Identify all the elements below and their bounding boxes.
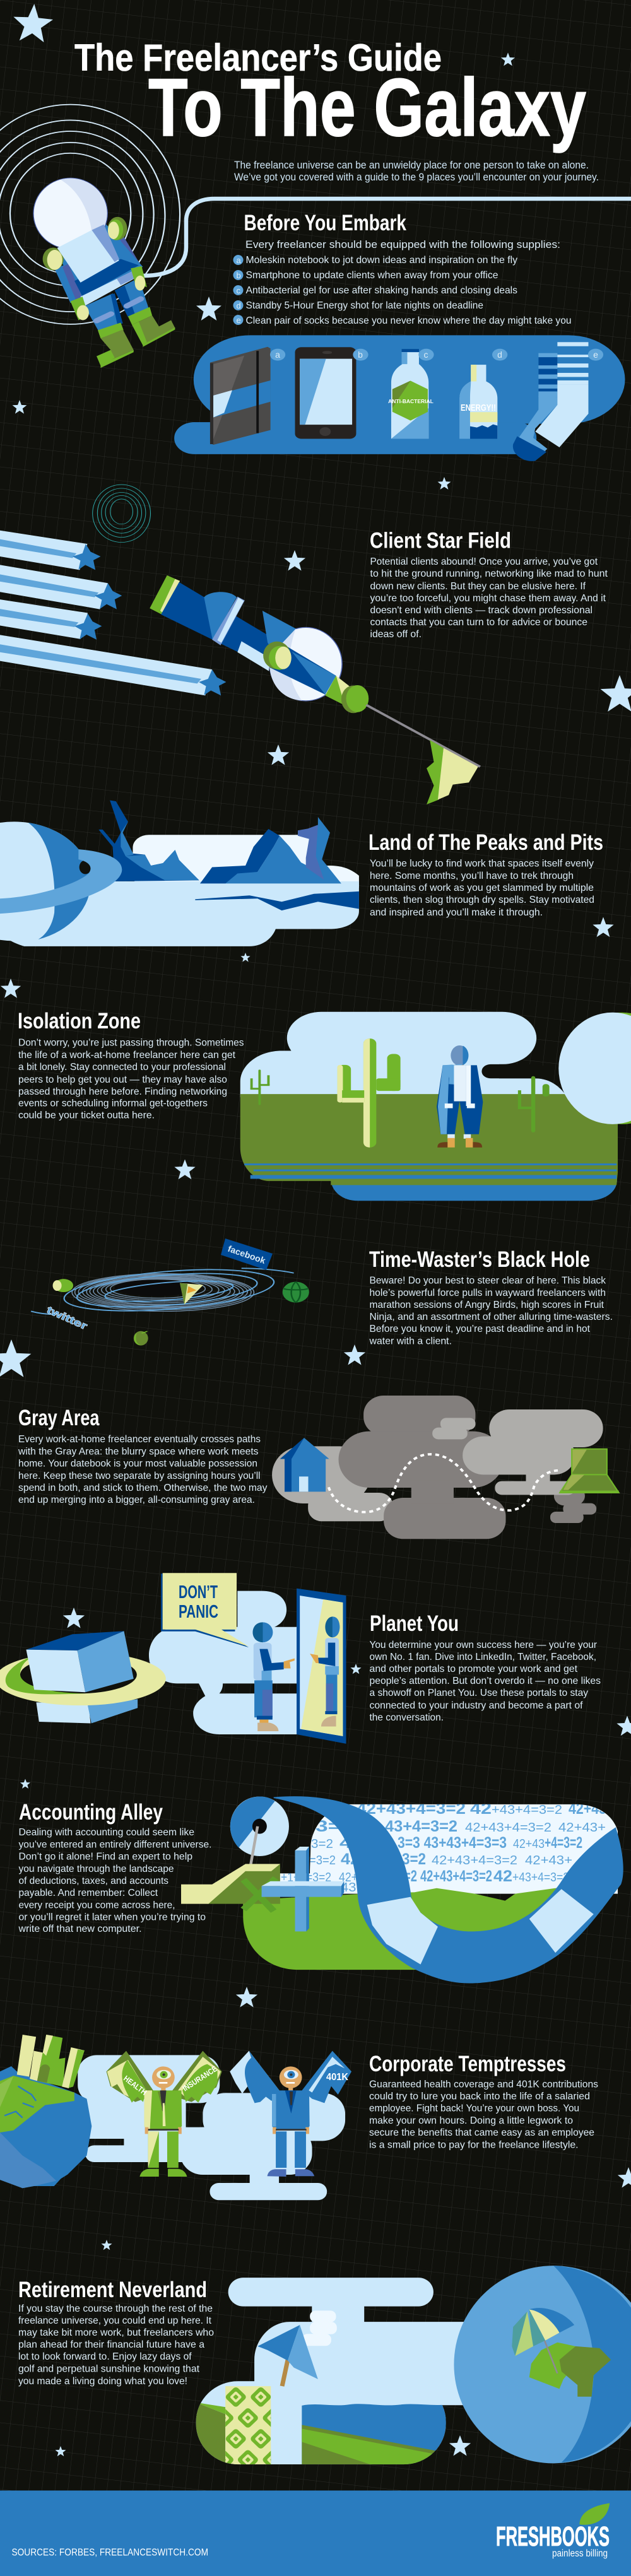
scrolling math equations: 42+ <box>339 1871 358 1885</box>
blue corporate man with wings <box>230 2051 351 2177</box>
body text: a bit lonely. Stay connected to your professional <box>18 1062 226 1073</box>
icon: house <box>280 1438 329 1491</box>
gray clouds <box>272 1396 619 1539</box>
body text: ideas off of. <box>370 629 422 640</box>
heading: Accounting Alley <box>19 1800 163 1825</box>
tray labels: a <box>275 350 280 360</box>
heading: Client Star Field <box>370 529 511 553</box>
heading: Isolation Zone <box>18 1009 141 1033</box>
supplies checklist: e <box>236 315 241 325</box>
scrolling math equations: 42+43+ <box>525 1854 572 1867</box>
scrolling math equations: +43+4=3=2 <box>492 1803 562 1817</box>
scrolling math equations: +4=3=2 <box>545 1834 582 1852</box>
heading: Retirement Neverland <box>18 2278 207 2302</box>
body text: people’s attention. But don’t overdo it — no one likes <box>370 1676 601 1686</box>
scrolling math equations: 42 <box>470 1800 492 1818</box>
supplies checklist: b <box>236 271 241 280</box>
heading: Planet You <box>370 1611 459 1636</box>
body text: doesn't end with clients — track down professional <box>370 605 593 616</box>
body text: could be your ticket outta here. <box>18 1110 155 1120</box>
film roll wheel <box>230 1796 289 1878</box>
scrolling math equations: 42+43 <box>569 1800 606 1818</box>
green corporate man with wings: INSURANCE <box>181 2064 219 2093</box>
beach scene <box>196 2278 479 2471</box>
body text: water with a client. <box>369 1336 452 1347</box>
icon: notebook <box>210 347 271 445</box>
body text: Dealing with accounting could seem like <box>19 1827 194 1838</box>
supplies checklist: Smartphone to update clients when away from your office <box>246 270 498 281</box>
icon: smartphone <box>295 347 356 439</box>
body text: the conversation. <box>370 1712 444 1723</box>
ringed planet <box>0 821 122 941</box>
footer <box>0 2491 631 2576</box>
icon: laptop <box>560 1449 619 1493</box>
panel: corporate temptresses <box>0 2035 598 2200</box>
body text: You’ll be lucky to find work that spaces itself evenly <box>370 858 594 869</box>
math symbols: minus step, x and plus <box>181 1847 344 1931</box>
body text: Guaranteed health coverage and 401K contributions <box>369 2079 598 2090</box>
body text: make your own hours. Doing a little legwork to <box>369 2115 573 2126</box>
supplies checklist <box>233 238 572 326</box>
supplies checklist: d <box>236 301 241 310</box>
body text: and other portals to promote your work and get <box>370 1664 578 1674</box>
body text: Ninja, and an assortment of other alluring time-wasters. <box>370 1312 613 1322</box>
body text: mountains of work as you get slammed by multiple <box>370 883 594 893</box>
facebook banner <box>221 1238 273 1270</box>
tray labels <box>275 350 598 413</box>
intro text: The freelance universe can be an unwieldy place for one person to take on alone. <box>234 160 589 171</box>
heading: Time-Waster’s Black Hole <box>369 1247 590 1272</box>
scrolling math equations: 43+4=3=2 <box>385 1818 457 1835</box>
body text: here. Some months, you’ll have to trek through <box>370 871 574 881</box>
scrolling math equations: +1+4=3=2 <box>281 1871 331 1885</box>
shooting stars <box>0 531 226 695</box>
panel: planet you <box>0 1573 601 1744</box>
logo: freshbooks: painless billing <box>552 2548 608 2559</box>
body text <box>370 1640 601 1723</box>
body text: every receipt you come across here, <box>19 1900 175 1911</box>
supplies checklist: Antibacterial gel for use after shaking hands and closing deals <box>246 285 517 296</box>
tray labels: c <box>424 350 428 360</box>
body text <box>18 1827 212 1934</box>
green corporate man with wings <box>107 2051 222 2177</box>
body text: down new clients. But they can be elusive here. If <box>370 581 586 592</box>
facebook banner: facebook <box>227 1244 267 1266</box>
tray labels: ENERGY!! <box>461 403 496 413</box>
scrolling math equations: 42 <box>339 1834 365 1852</box>
body text: a showoff on Planet You. Use these portals to stay <box>370 1688 588 1698</box>
scrolling math equations: 43+4=3=2 <box>341 1881 404 1895</box>
cloud backdrop <box>149 1591 298 1734</box>
body text: Beware! Do your best to steer clear of here. This black <box>370 1276 606 1286</box>
body text: If you stay the course through the rest of the <box>18 2303 213 2314</box>
cube planet with ring <box>0 1631 166 1724</box>
jagged planet with castle <box>0 2035 91 2188</box>
sky and green hill <box>278 1804 618 1894</box>
black hole swirl <box>31 1263 294 1317</box>
heading: Before You Embark <box>244 211 406 235</box>
body text: to hit the ground running, networking like mad to hunt <box>370 568 608 579</box>
scrolling math equations: 3=3 43+43+4=3=3 <box>398 1834 507 1852</box>
twitter label: twitter <box>45 1305 88 1332</box>
icon: socks <box>270 342 603 461</box>
body text: here. Keep these two separate by assigning hours you’ll <box>18 1471 261 1481</box>
scrolling math equations: 3=2 <box>316 1818 353 1835</box>
tray labels: b <box>358 350 363 360</box>
body text: may take bit more work, but freelancers who <box>18 2327 214 2338</box>
scrolling math equations: 3=2 <box>402 1850 426 1868</box>
tray labels: d <box>497 350 502 360</box>
body text: freelance universe, you could end up here. It <box>18 2315 212 2326</box>
body text: could try to lure you back into the life of a salaried <box>369 2091 590 2102</box>
body text: or you’ll regret it later when you’re trying to <box>19 1912 206 1923</box>
flag on telescope rod <box>366 705 480 804</box>
body text: you made a living doing what you love! <box>18 2376 187 2387</box>
body text: golf and perpetual sunshine knowing that <box>18 2363 200 2374</box>
small cacti <box>251 1069 550 1132</box>
air tube <box>143 199 631 276</box>
icon: antibacterial gel bottle <box>391 349 428 439</box>
green hill and blue road <box>243 1796 623 1983</box>
panel: client star field <box>0 485 608 804</box>
scrolling math equations: 3=2 <box>311 1837 333 1851</box>
supplies checklist: Every freelancer should be equipped with the following supplies: <box>245 238 560 250</box>
mirror with reflection <box>297 1589 346 1744</box>
supplies checklist: Moleskin notebook to jot down ideas and inspiration on the fly <box>246 255 517 266</box>
panel: retirement neverland <box>18 2266 631 2471</box>
body text: passed through here before. Finding networking <box>18 1086 227 1097</box>
logo: freshbooks <box>496 2503 610 2559</box>
telescope <box>150 575 369 713</box>
heading: Corporate Temptresses <box>369 2052 566 2076</box>
scrolling math equations: 42+43+4=3=2 <box>357 1800 466 1818</box>
body text: plan ahead for their financial future have a <box>18 2339 204 2350</box>
small teal rings <box>93 485 151 543</box>
body text: Potential clients abound! Once you arrive, you’ve got <box>370 556 598 567</box>
body text <box>18 2303 214 2387</box>
body text: marathon sessions of Angry Birds, high scores in Fruit <box>370 1300 604 1310</box>
body text <box>369 2079 598 2150</box>
body text <box>370 556 608 640</box>
body text: you’ve entered an entirely different universe. <box>19 1840 212 1850</box>
body text: spend in both, and stick to them. Otherwise, the two may <box>18 1483 268 1493</box>
orbit rings behind astronaut <box>0 105 180 324</box>
body text: contacts that you can turn to for advice or bounce <box>370 617 587 628</box>
body text: payable. And remember: Collect <box>19 1888 158 1898</box>
body text <box>369 1276 613 1347</box>
body text: Every work-at-home freelancer eventually crosses paths <box>18 1434 261 1445</box>
cloud backdrop <box>78 2055 345 2200</box>
body text: with the Gray Area: the blurry space where work meets <box>18 1446 258 1457</box>
person pointing <box>253 1622 295 1731</box>
planet at edge <box>558 1013 631 1124</box>
supplies checklist: Clean pair of socks because you never know where the day might take you <box>246 315 572 326</box>
icon: energy shot bottle <box>459 365 497 439</box>
body text: clients, then slog through dry spells. Stay motivated <box>370 895 594 905</box>
body text: peers to help get you out — they may have also <box>18 1074 227 1085</box>
panel: land of the peaks and pits <box>0 801 603 946</box>
body text: the life of a work-at-home freelancer here can get <box>18 1050 236 1061</box>
sources: SOURCES: FORBES, FREELANCESWITCH.COM <box>11 2548 208 2558</box>
title: The Freelancer’s Guide <box>74 37 442 79</box>
lone freelancer <box>437 1045 483 1148</box>
blue corporate man with wings: 401K <box>326 2072 348 2083</box>
body text: Before you know it, you’re past deadline and in hot <box>370 1324 591 1334</box>
body text: lot to look forward to. Enjoy lazy days of <box>18 2351 192 2362</box>
body text: of deductions, taxes, and accounts <box>19 1876 168 1886</box>
angry bird <box>180 1283 203 1304</box>
scrolling math equations: 42+43+4=3=2 <box>432 1854 517 1867</box>
scrolling math equations: 42 <box>341 1850 360 1868</box>
body text <box>18 1434 267 1505</box>
body text: you’re too forceful, you might chase them away. And it <box>370 593 606 604</box>
supplies checklist: c <box>236 286 241 295</box>
scrolling math equations: 42+43+ <box>558 1821 606 1835</box>
body text: own No. 1 fan. Dive into LinkedIn, Twitter, Facebook, <box>370 1652 596 1662</box>
body text: secure the benefits that came easy as an employee <box>369 2127 594 2138</box>
panel: accounting alley <box>18 1796 623 1983</box>
body text: Don’t go it alone! Find an expert to help <box>19 1851 192 1862</box>
body text: you navigate through the landscape <box>19 1864 174 1874</box>
astronaut <box>33 178 175 368</box>
scrolling math equations: 42+43+4=3=2 <box>465 1821 551 1835</box>
big planet with island <box>454 2266 631 2463</box>
tray labels: e <box>593 350 598 360</box>
body text: events or scheduling informal get-togethers <box>18 1098 208 1109</box>
green corporate man with wings: HEALTH <box>122 2074 148 2097</box>
big cactus <box>337 1038 401 1148</box>
scrolling math equations: =2 42+43+4=3=2 <box>404 1867 492 1885</box>
body text: and inspired and you’ll make it through. <box>370 907 543 918</box>
body text <box>370 858 594 918</box>
tray labels: ANTI-BACTERIAL <box>388 398 433 404</box>
dashed path from home to laptop <box>329 1454 561 1512</box>
body text: hole’s powerful force pulls in wayward freelancers with <box>370 1288 606 1298</box>
body text <box>18 1037 244 1120</box>
scrolling math equations: =3=2 <box>309 1854 336 1867</box>
scrolling math equations: 42 <box>493 1867 512 1885</box>
title <box>74 37 586 153</box>
body text: employee. Fight back! You’re your own boss. You <box>369 2103 579 2114</box>
body text: is a small price to pay for the freelance lifestyle. <box>369 2139 578 2150</box>
intro text <box>234 160 599 183</box>
body text: write off that new computer. <box>18 1924 142 1934</box>
speech bubble: don't panic <box>161 1573 249 1647</box>
supplies tray with icons <box>174 335 625 461</box>
fruit <box>53 1279 309 1346</box>
panel: time-waster's black hole <box>31 1238 613 1347</box>
supplies checklist: a <box>236 256 241 265</box>
panel: isolation zone <box>18 1009 631 1201</box>
speech bubble: don't panic: DON’T <box>179 1582 218 1603</box>
heading: Gray Area <box>18 1406 100 1430</box>
supplies checklist: Standby 5-Hour Energy shot for late nights on deadline <box>246 300 483 311</box>
panel: gray area <box>18 1396 619 1539</box>
icy landscape <box>0 801 359 946</box>
scrolling math equations: +43+4=3=2 <box>512 1871 569 1885</box>
intro text: We’ve got you covered with a guide to the 9 places you’ll encounter on your journey. <box>234 172 599 183</box>
scrolling math equations: 42+43 <box>513 1837 545 1851</box>
body text: connected to your industry and become a part of <box>370 1700 583 1711</box>
body text: You determine your own success here — you’re your <box>370 1640 598 1650</box>
speech bubble: don't panic: PANIC <box>179 1602 218 1622</box>
desert scene <box>240 1012 631 1201</box>
panel: before you embark <box>174 211 625 461</box>
body text: end up merging into a bigger, all-consuming gray area. <box>18 1495 255 1505</box>
body text: home. Your datebook is your most valuable possession <box>18 1459 257 1469</box>
body text: Don’t worry, you’re just passing through. Sometimes <box>18 1037 244 1049</box>
scrolling math equations <box>281 1800 606 1895</box>
